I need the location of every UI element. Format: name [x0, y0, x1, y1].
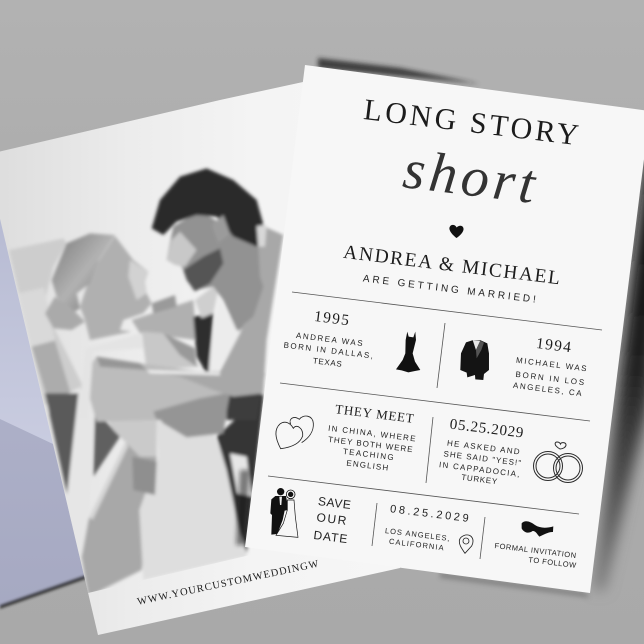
panel: they meet: THEY BOTH WERE — [328, 435, 413, 454]
panel: engagement date: HE ASKED AND — [447, 439, 520, 456]
website: WWW.YOURCUSTOMWEDDINGW — [136, 559, 320, 608]
panel: formal invitation: FORMAL INVITATION — [494, 541, 577, 560]
woman's arm — [178, 226, 284, 399]
panel: invitation card — [245, 65, 644, 593]
icon: bride and groom — [270, 488, 298, 537]
panel: they meet — [328, 401, 416, 473]
panel: engagement date — [439, 417, 524, 486]
panel: they meet: IN CHINA, WHERE — [328, 424, 416, 443]
panel: they meet: TEACHING — [342, 447, 394, 462]
upper scene — [45, 168, 283, 422]
man's suit below — [224, 392, 264, 423]
back card: photo — [0, 82, 400, 635]
icon: tuxedo — [460, 340, 489, 380]
icon: dress — [396, 332, 420, 372]
panel: andrea 1995: BORN IN DALLAS, — [283, 341, 374, 360]
main card shadows — [236, 58, 644, 598]
panel: formal invitation — [494, 541, 578, 570]
panel: save our date — [313, 494, 352, 546]
panel: engagement date: SHE SAID "YES!" — [443, 449, 522, 468]
panel: andrea 1995 — [283, 308, 374, 369]
icon: two hearts — [276, 416, 313, 449]
lower scene — [45, 393, 263, 597]
panel: michael 1994: 1994 — [535, 335, 572, 356]
panel: save our date: SAVE — [317, 494, 352, 512]
panel: save our date: OUR — [316, 510, 348, 528]
panel: save our date: DATE — [313, 528, 348, 546]
icon: bow tie — [522, 521, 553, 537]
panel: michael 1994: ANGELES, CA — [513, 381, 583, 398]
panel: wedding date and place: CALIFORNIA — [388, 537, 444, 552]
icon: wedding rings — [534, 442, 582, 482]
panel: formal invitation: TO FOLLOW — [528, 555, 578, 570]
building — [9, 238, 197, 413]
panel: they meet: THEY MEET — [334, 401, 415, 426]
panel: andrea 1995: 1995 — [313, 308, 350, 329]
woman's hair and head — [80, 236, 152, 340]
panel: michael 1994: BORN IN LOS — [515, 370, 585, 387]
panel: wedding date and place: 08.25.2029 — [389, 503, 469, 525]
man's head — [167, 210, 263, 330]
icon: heart — [449, 225, 464, 238]
title: long story: LONG STORY — [362, 93, 580, 152]
man's neck and chest — [236, 324, 244, 332]
panel: engagement date: IN CAPPADOCIA, — [439, 460, 520, 479]
panel: engagement date: TURKEY — [461, 473, 498, 486]
title: short script: short — [400, 138, 540, 216]
subtitle: ARE GETTING MARRIED! — [362, 273, 536, 306]
panel: they meet: ENGLISH — [346, 458, 389, 473]
panel: wedding date and place: LOS ANGELES, — [384, 526, 450, 543]
dividers — [268, 292, 602, 559]
panel: andrea 1995: ANDREA WAS — [296, 331, 363, 348]
panel: engagement date: 05.25.2029 — [449, 417, 524, 441]
icon: map pin — [459, 535, 473, 553]
panel: andrea 1995: TEXAS — [312, 356, 342, 369]
panel: michael 1994: MICHAEL WAS — [516, 356, 587, 373]
panel: wedding date and place — [384, 503, 469, 552]
envelope — [0, 200, 90, 609]
woman's dress and body — [142, 332, 200, 370]
names: ANDREA & MICHAEL — [342, 242, 561, 289]
panel: michael 1994 — [513, 335, 587, 398]
